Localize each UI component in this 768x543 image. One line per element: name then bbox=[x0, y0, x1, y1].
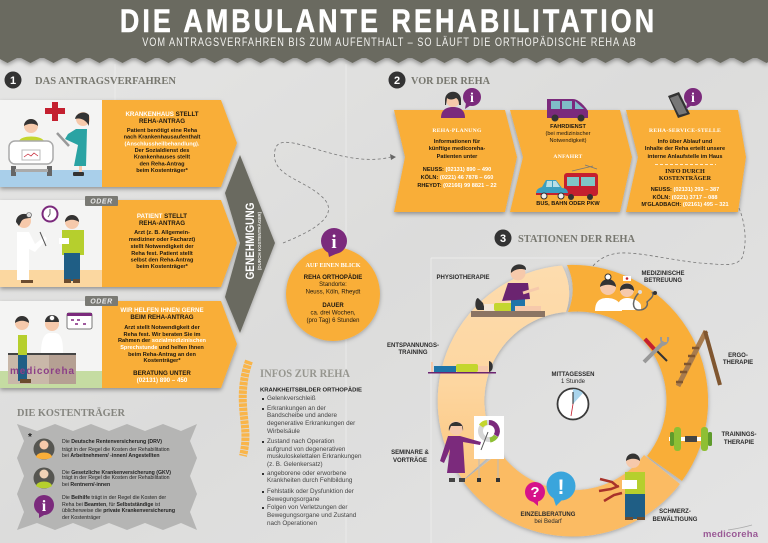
label: oder 1: ODER bbox=[90, 198, 113, 206]
panel: Reha-Service-Stelle: interne Anlaufstelle im Haus bbox=[647, 154, 723, 160]
panel: medicoreha: Rahmen der sozialmedizinischen bbox=[118, 338, 207, 344]
icon: info bubble: i bbox=[470, 91, 474, 106]
callout: auf einen Blick: AUF EINEN BLICK bbox=[305, 262, 361, 269]
panel: Reha-Planung: NEUSS: (02131) 890 – 490 bbox=[423, 167, 491, 173]
station: Trainingstherapie: THERAPIE bbox=[724, 440, 754, 446]
panel: Krankenhaus: nach Krankenhausaufenthalt bbox=[124, 135, 201, 141]
panel: Patient: PATIENT STELLT bbox=[137, 213, 187, 220]
panel: Krankenhaus: (Anschlussheilbehandlung). bbox=[125, 141, 200, 147]
bullet list: degenerative Erkrankungen der bbox=[267, 420, 355, 427]
icon: person orange bbox=[34, 438, 54, 460]
panel: medicoreha: Reha fest. Wir beraten Sie im bbox=[123, 332, 201, 338]
panel: Patient: beim Kostenträger* bbox=[136, 264, 189, 270]
callout: auf einen Blick: (pro Tag) 6 Stunden bbox=[307, 318, 359, 324]
bullet list: nach Operationen bbox=[267, 520, 318, 527]
panel: Kostenträger: üblicherweise die private Krankenversicherung bbox=[62, 508, 175, 514]
panel: Kostenträger: trägt in der Regel die Kosten der Rehabilitation bbox=[62, 475, 170, 481]
panel: Patient: stellt Notwendigkeit der bbox=[130, 244, 194, 250]
station: Schmerzbewältigung: BEWÄLTIGUNG bbox=[653, 516, 698, 523]
heading: section 1 bbox=[4, 72, 176, 88]
station: Medizinische Betreuung bbox=[595, 271, 685, 311]
bullet list: Bandscheibe und andere bbox=[267, 412, 338, 419]
station: Einzelberatung bbox=[521, 472, 576, 525]
logo: medicoreha: medicoreha bbox=[703, 529, 759, 540]
panel: Fahrdienst und Anfahrt: Notwendigkeit) bbox=[550, 138, 587, 144]
chevron: Genehmigung: GENEHMIGUNG bbox=[245, 202, 257, 280]
panel: Patient: REHA-ANTRAG bbox=[139, 220, 185, 227]
callout: auf einen Blick: Standorte: bbox=[319, 282, 347, 288]
icon: consultation desk bbox=[8, 313, 92, 384]
panel: Krankenhaus: REHA-ANTRAG bbox=[139, 118, 185, 125]
heading: section 3: STATIONEN DER REHA bbox=[518, 233, 635, 245]
panel: Reha-Service-Stelle bbox=[626, 88, 746, 212]
text block: Infos zur Reha: KRANKHEITSBILDER ORTHOPÄDIE bbox=[260, 386, 362, 394]
panel: medicoreha: BERATUNG UNTER bbox=[133, 370, 191, 377]
panel: medicoreha: Arzt stellt Notwendigkeit der bbox=[124, 325, 201, 331]
chevron: Genehmigung: (DURCH KOSTENTRÄGER) bbox=[256, 211, 262, 270]
panel: Reha-Planung: KÖLN: (0221) 46 7878 – 660 bbox=[421, 174, 493, 181]
bullet list: Gelenkverschleiß bbox=[267, 395, 316, 402]
icon: info bubble: i bbox=[331, 232, 337, 253]
header banner bbox=[0, 0, 768, 64]
bullet list: Bewegungsorgane bbox=[267, 496, 320, 503]
panel: Reha-Service-Stelle: REHA-SERVICE-STELLE bbox=[649, 128, 721, 134]
clock: Mittagessen: 1 Stunde bbox=[561, 379, 586, 385]
station: Schmerzbewältigung bbox=[599, 454, 698, 523]
bullet list bbox=[262, 395, 362, 527]
bullet list: angeborene oder erworbene bbox=[267, 470, 347, 477]
icon: person green bbox=[34, 468, 54, 488]
callout: auf einen Blick: Neuss, Köln, Rheydt bbox=[306, 290, 361, 296]
bullet list: aufgrund von degenerativen bbox=[267, 446, 346, 453]
panel: Patient: mediziner oder Facharzt) bbox=[129, 237, 195, 243]
panel: medicoreha: WIR HELFEN IHNEN GERNE bbox=[120, 307, 204, 314]
label: oder 1 bbox=[85, 196, 118, 206]
callout: auf einen Blick: ca. drei Wochen, bbox=[311, 310, 356, 316]
icon: info bubble: i bbox=[691, 91, 695, 106]
panel: Kostenträger bbox=[17, 406, 197, 530]
bullet list: Bewegungsorgane und Zustand bbox=[267, 512, 357, 519]
bullet list: Wirbelsäule bbox=[267, 428, 300, 435]
bullet list: muskuloskelettalen Erkrankungen bbox=[267, 453, 362, 460]
panel: Fahrdienst und Anfahrt: BUS, BAHN ODER PKW bbox=[536, 201, 600, 207]
callout: auf einen Blick: DAUER bbox=[322, 303, 344, 309]
heading: section 3: 3 bbox=[500, 233, 506, 245]
label: oder 2: ODER bbox=[90, 298, 113, 306]
panel: Reha-Service-Stelle: INFO DURCH bbox=[665, 168, 705, 175]
icon: purple van bbox=[547, 99, 588, 122]
station: Einzelberatung: bei Bedarf bbox=[534, 519, 562, 525]
station: Trainingstherapie bbox=[669, 427, 756, 451]
panel: Reha-Service-Stelle: Inhalte der Reha erteilt unsere bbox=[645, 146, 725, 152]
callout: auf einen Blick: REHA ORTHOPÄDIE bbox=[304, 274, 362, 281]
panel: Kostenträger: Die Deutsche Rentenversicherung (DRV) bbox=[62, 439, 162, 445]
panel: Kostenträger: DIE KOSTENTRÄGER bbox=[17, 406, 126, 419]
panel: Reha-Planung: Patienten unter bbox=[437, 154, 478, 160]
icon: call agent bbox=[441, 92, 465, 118]
bullet list: (z. B. Gelenkersatz) bbox=[267, 461, 323, 468]
panel: Patient bbox=[0, 200, 237, 287]
panel: Krankenhaus: Krankenhauses stellt bbox=[134, 155, 190, 161]
station: Seminare und Vorträge: SEMINARE & bbox=[391, 450, 430, 456]
panel: Reha-Service-Stelle: NEUSS: (02131) 293 – 387 bbox=[651, 187, 719, 193]
heading: section 2: VOR DER REHA bbox=[411, 75, 490, 87]
panel: Patient: selbst den Reha-Antrag bbox=[131, 258, 194, 264]
panel: Krankenhaus: Patient benötigt eine Reha bbox=[127, 128, 198, 134]
station: Ergotherapie bbox=[644, 331, 753, 386]
station: Seminare und Vorträge bbox=[391, 416, 504, 482]
panel: Fahrdienst und Anfahrt: FAHRDIENST bbox=[550, 124, 586, 130]
heading: section 3 bbox=[494, 230, 635, 246]
dashed arrow to stations ring bbox=[586, 208, 745, 279]
panel: Patient: Arzt (z. B. Allgemein- bbox=[134, 230, 190, 236]
panel: Kostenträger: trägt in der Regel die Kosten der Rehabilitation bbox=[62, 447, 170, 453]
station: Schmerzbewältigung: SCHMERZ- bbox=[659, 509, 691, 515]
heading: section 2: 2 bbox=[394, 75, 400, 87]
icon: info bubble: i bbox=[42, 498, 47, 515]
panel: Kostenträger: * bbox=[28, 432, 32, 443]
station: Einzelberatung: EINZELBERATUNG bbox=[521, 512, 576, 518]
bullet list: Fehlstatik oder Dysfunktion der bbox=[267, 488, 354, 495]
panel: Krankenhaus: den Reha-Antrag bbox=[139, 161, 185, 167]
icon: hospital scene bbox=[9, 102, 90, 176]
heading: section 2 bbox=[388, 72, 490, 88]
ring chart: stations bbox=[438, 265, 708, 537]
panel: Reha-Planung: Informationen für bbox=[434, 139, 481, 145]
panel: Fahrdienst und Anfahrt bbox=[510, 99, 632, 212]
dashed arrow to section 2 bbox=[274, 142, 396, 243]
icon: consultation desk: medicoreha bbox=[10, 366, 74, 377]
bullet list: Krankheiten durch Fehlbildung bbox=[267, 477, 353, 484]
chevron: Genehmigung bbox=[225, 155, 275, 333]
panel: Krankenhaus: beim Kostenträger* bbox=[136, 168, 189, 174]
panel: Reha-Service-Stelle: M'GLADBACH: (02161) 495 – 321 bbox=[641, 202, 729, 208]
station: Entspannungstraining: ENTSPANNUNGS- bbox=[387, 343, 439, 349]
text block: Infos zur Reha bbox=[260, 368, 362, 527]
panel: Kostenträger: Die Gesetzliche Krankenversicherung (GKV) bbox=[62, 470, 171, 476]
heading: section 1: DAS ANTRAGSVERFAHREN bbox=[35, 75, 176, 87]
panel: Kostenträger: Reha bei Beamten, für Selbstständige ist bbox=[62, 502, 161, 508]
icon: info bubble bbox=[34, 495, 54, 518]
panel: Kostenträger: bei Arbeitnehmern/ -innen/ Angestellten bbox=[62, 453, 160, 459]
panel: Reha-Service-Stelle: Info über Ablauf und bbox=[658, 139, 713, 145]
clock: Mittagessen: MITTAGESSEN bbox=[552, 372, 594, 378]
icon: tram and car bbox=[536, 165, 598, 200]
panel: Fahrdienst und Anfahrt: (bei medizinischer bbox=[545, 131, 591, 137]
station: Medizinische Betreuung: MEDIZINISCHE bbox=[641, 271, 685, 277]
panel: Reha-Service-Stelle: KOSTENTRÄGER bbox=[659, 175, 712, 182]
subtitle: VOM ANTRAGSVERFAHREN BIS ZUM AUFENTHALT – SO LÄUFT DIE ORTHOPÄDISCHE REHA AB bbox=[142, 36, 636, 49]
panel: Fahrdienst und Anfahrt: ANFAHRT bbox=[553, 154, 583, 160]
station: Physiotherapie: PHYSIOTHERAPIE bbox=[436, 275, 490, 281]
callout: auf einen Blick bbox=[286, 228, 380, 341]
station: Ergotherapie: THERAPIE bbox=[723, 360, 753, 366]
bullet list: Erkrankungen an der bbox=[267, 405, 326, 412]
panel: medicoreha bbox=[0, 301, 237, 388]
clock: Mittagessen bbox=[552, 372, 594, 420]
panel: medicoreha: beim Reha-Antrag an den bbox=[128, 352, 196, 358]
station: Entspannungstraining bbox=[387, 343, 496, 374]
station: Einzelberatung: ? bbox=[530, 484, 540, 501]
station: Seminare und Vorträge: VORTRÄGE bbox=[393, 457, 427, 464]
station: Ergotherapie: ERGO- bbox=[728, 353, 748, 359]
text block: Infos zur Reha: INFOS ZUR REHA bbox=[260, 368, 351, 380]
panel: Kostenträger: der Kostenträger bbox=[62, 515, 101, 521]
station: Physiotherapie bbox=[436, 264, 545, 317]
panel: Reha-Planung: RHEYDT: (02166) 99 8821 – 22 bbox=[417, 183, 497, 189]
icon: smartphone bbox=[668, 92, 690, 118]
bullet list: Zustand nach Operation bbox=[267, 438, 335, 445]
panel: Reha-Planung: künftige medicoreha- bbox=[429, 146, 485, 152]
panel: Kostenträger: bei Rentnern/-innen bbox=[62, 482, 110, 488]
station: Trainingstherapie: TRAININGS- bbox=[722, 432, 756, 438]
panel: medicoreha: Kostenträger* bbox=[144, 358, 181, 364]
icon: spine bbox=[243, 361, 249, 456]
panel: Patient: Reha fest. Patient stellt bbox=[131, 251, 193, 257]
panel: Krankenhaus bbox=[0, 100, 237, 187]
heading: section 1: 1 bbox=[10, 75, 16, 87]
panel: medicoreha: Sprechstunde und helfen Ihnen bbox=[120, 345, 204, 351]
panel: Kostenträger: Die Beihilfe trägt in der Regel die Kosten der bbox=[62, 495, 166, 501]
station: Einzelberatung: ! bbox=[558, 476, 564, 499]
icon: doctor and patient bbox=[16, 206, 84, 283]
panel: Krankenhaus: KRANKENHAUS STELLT bbox=[125, 111, 199, 118]
panel: Reha-Planung: REHA-PLANUNG bbox=[432, 128, 482, 134]
panel: Reha-Planung bbox=[394, 88, 517, 212]
bullet list: Folgen von Verletzungen der bbox=[267, 504, 348, 511]
panel: medicoreha: (02131) 890 – 450 bbox=[137, 377, 188, 384]
panel: medicoreha: BEIM REHA-ANTRAG bbox=[130, 314, 194, 321]
panel: Reha-Service-Stelle: KÖLN: (0221) 3717 – 088 bbox=[652, 194, 718, 201]
station: Medizinische Betreuung: BETREUUNG bbox=[644, 278, 682, 284]
panel: Krankenhaus: Der Sozialdienst des bbox=[135, 148, 189, 154]
station: Entspannungstraining: TRAINING bbox=[398, 350, 428, 356]
title: DIE AMBULANTE REHABILITATION bbox=[120, 4, 654, 40]
label: oder 2 bbox=[85, 296, 118, 306]
